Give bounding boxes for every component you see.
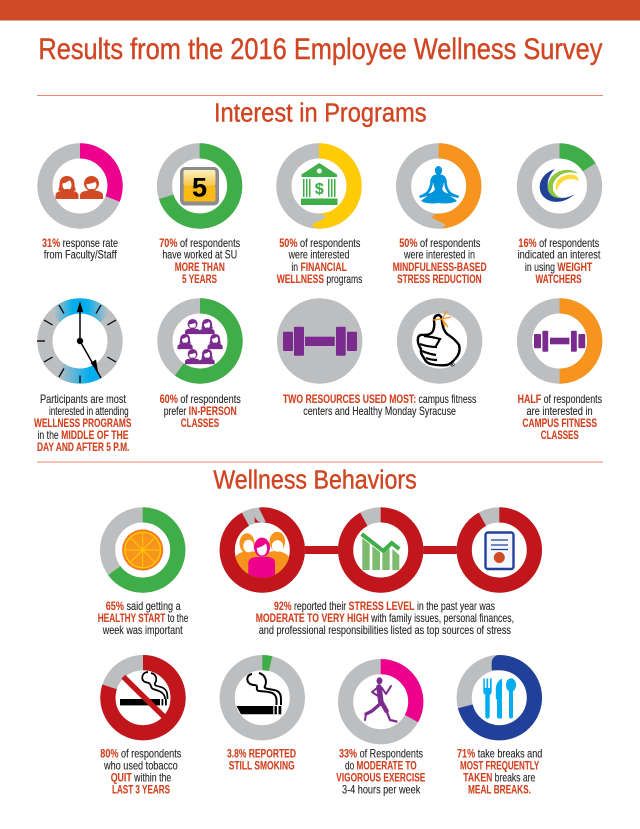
- caption: 3.8% REPORTED: [227, 747, 296, 761]
- caption: 16% of respondents: [518, 236, 599, 250]
- caption: [100, 747, 181, 797]
- caption: do MODERATE TO: [345, 759, 417, 773]
- panel: 71% meal breaks: [457, 663, 542, 797]
- caption: HEALTHY START to the: [98, 611, 189, 625]
- heading: Interest in Programs: Interest in Programs: [214, 100, 426, 128]
- caption: [336, 747, 425, 797]
- caption: were interested: [288, 248, 349, 262]
- icon: group of six people: [178, 319, 223, 364]
- caption: 60% of respondents: [160, 392, 241, 406]
- caption: prefer IN-PERSON: [164, 404, 237, 418]
- caption: who used tobacco: [103, 759, 178, 773]
- panel: 80% quit tobacco: [100, 663, 181, 797]
- panel: 33% vigorous exercise: [336, 667, 425, 797]
- caption: [160, 392, 241, 430]
- panel: 31% response rate: [42, 151, 118, 262]
- caption: [256, 599, 514, 637]
- caption: [159, 236, 240, 286]
- icon: number five tile: 5: [192, 172, 207, 202]
- icon: thumbs up on grey ring: ®: [450, 360, 455, 368]
- caption: VIGOROUS EXERCISE: [336, 771, 425, 785]
- caption: in using WEIGHT: [525, 260, 593, 274]
- icon: fork knife spoon: [483, 678, 516, 718]
- donut chart 3.8%: [227, 663, 297, 733]
- caption: WELLNESS PROGRAMS: [34, 416, 131, 430]
- caption: STILL SMOKING: [229, 759, 295, 773]
- caption: [518, 236, 601, 286]
- caption: week was important: [102, 623, 183, 637]
- caption: STRESS REDUCTION: [397, 272, 482, 286]
- caption: 33% of Respondents: [339, 747, 423, 761]
- panel: 50% financial wellness: [277, 151, 362, 286]
- icon: dumbbell on grey disc: [277, 298, 362, 384]
- caption: 70% of respondents: [159, 236, 240, 250]
- donut chart 80%: [108, 663, 178, 733]
- donut chart 92% finances: [346, 515, 416, 585]
- caption: CAMPUS FITNESS: [522, 416, 597, 430]
- connector bars: [300, 546, 463, 554]
- caption: 80% of respondents: [100, 747, 181, 761]
- panel: two resources used most: [277, 298, 476, 418]
- caption: [277, 236, 362, 286]
- icon: family group: [233, 532, 291, 580]
- caption: indicated an interest: [518, 248, 601, 262]
- caption: LAST 3 YEARS: [112, 783, 170, 797]
- caption: QUIT within the: [111, 771, 172, 785]
- caption: 92% reported their STRESS LEVEL in the past year was: [274, 599, 495, 613]
- donut chart 16%: [524, 151, 595, 221]
- icon: no smoking sign: [120, 672, 168, 718]
- caption: [34, 392, 131, 454]
- icon: swirl logo: [540, 169, 579, 202]
- icon: document with seal: [486, 532, 514, 569]
- panel: 92% stress level: [227, 515, 534, 637]
- caption: are interested in: [526, 404, 593, 418]
- icon: cigarette with smoke: [236, 673, 281, 714]
- donut chart 71%: [464, 663, 534, 733]
- caption: MEAL BREAKS.: [468, 783, 531, 797]
- donut chart 92% professional: [464, 515, 534, 585]
- heading: Wellness Behaviors: Wellness Behaviors: [213, 466, 417, 494]
- caption: WATCHERS: [536, 272, 582, 286]
- donut chart 33%: [346, 667, 416, 737]
- panel: 3.8% still smoking: [227, 663, 297, 773]
- caption: MODERATE TO VERY HIGH with family issues, personal finances,: [256, 611, 514, 625]
- caption: in FINANCIAL: [291, 260, 347, 274]
- icon: small dumbbell: [534, 331, 585, 352]
- caption: [227, 747, 296, 773]
- caption: in the MIDDLE OF THE: [38, 428, 129, 442]
- top banner: [0, 0, 640, 20]
- icon: orange slice: [122, 529, 163, 571]
- caption: 71% take breaks and: [457, 747, 542, 761]
- caption: MINDFULNESS-BASED: [393, 260, 487, 274]
- donut chart 60%: [165, 306, 235, 376]
- caption: 5 YEARS: [182, 272, 217, 286]
- caption: [518, 392, 602, 442]
- caption: CLASSES: [181, 416, 219, 430]
- panel: 50% mindfulness: [393, 151, 487, 286]
- panel: 70% worked more than 5 years: [159, 151, 240, 286]
- caption: interested in attending: [49, 404, 129, 418]
- panel: clock and attendance times: [34, 301, 131, 454]
- caption: 50% of respondents: [399, 236, 480, 250]
- caption: centers and Healthy Monday Syracuse: [303, 404, 456, 418]
- donut chart 65%: [108, 515, 178, 585]
- caption: [42, 236, 118, 262]
- caption: and professional responsibilities listed as top sources of stress: [259, 623, 511, 637]
- caption: have worked at SU: [162, 248, 237, 262]
- caption: MOST FREQUENTLY: [460, 759, 539, 773]
- panel: 16% weight watchers: [518, 151, 601, 286]
- caption: 65% said getting a: [106, 599, 181, 613]
- caption: Participants are most: [40, 392, 127, 406]
- caption: MORE THAN: [175, 260, 225, 274]
- caption: TWO RESOURCES USED MOST: campus fitness: [283, 392, 476, 406]
- caption: CLASSES: [541, 428, 579, 442]
- donut chart 92% family: [227, 515, 297, 585]
- icon: clock: [37, 301, 116, 383]
- caption: [457, 747, 542, 797]
- icon: runner: [365, 677, 396, 722]
- caption: TAKEN breaks are: [463, 771, 536, 785]
- icon: meditating figure: [419, 166, 459, 203]
- caption: were interested in: [403, 248, 475, 262]
- icon: bank: $: [315, 181, 324, 198]
- icon: falling bar chart: [362, 534, 399, 570]
- donut chart 70%: [164, 151, 235, 221]
- caption: 3-4 hours per week: [342, 783, 421, 797]
- donut chart 31%: [45, 151, 115, 221]
- donut chart 50% yellow: [284, 151, 354, 221]
- icon: two women: [56, 176, 103, 199]
- caption: from Faculty/Staff: [44, 248, 117, 262]
- caption: HALF of respondents: [518, 392, 602, 406]
- donut chart 50% orange: [404, 151, 474, 221]
- panel: 65% healthy start: [98, 515, 189, 637]
- caption: 31% response rate: [42, 236, 118, 250]
- donut chart 50% orange: [524, 306, 595, 376]
- caption: [98, 599, 189, 637]
- caption: DAY AND AFTER 5 P.M.: [37, 440, 129, 454]
- caption: [283, 392, 476, 418]
- icon: thumbs up on grey ring: [404, 306, 475, 376]
- panel: half interested in campus fitness: [518, 306, 602, 442]
- caption: WELLNESS programs: [277, 272, 362, 286]
- caption: 50% of respondents: [279, 236, 360, 250]
- caption: [393, 236, 487, 286]
- panel: 60% in-person classes: [160, 306, 241, 430]
